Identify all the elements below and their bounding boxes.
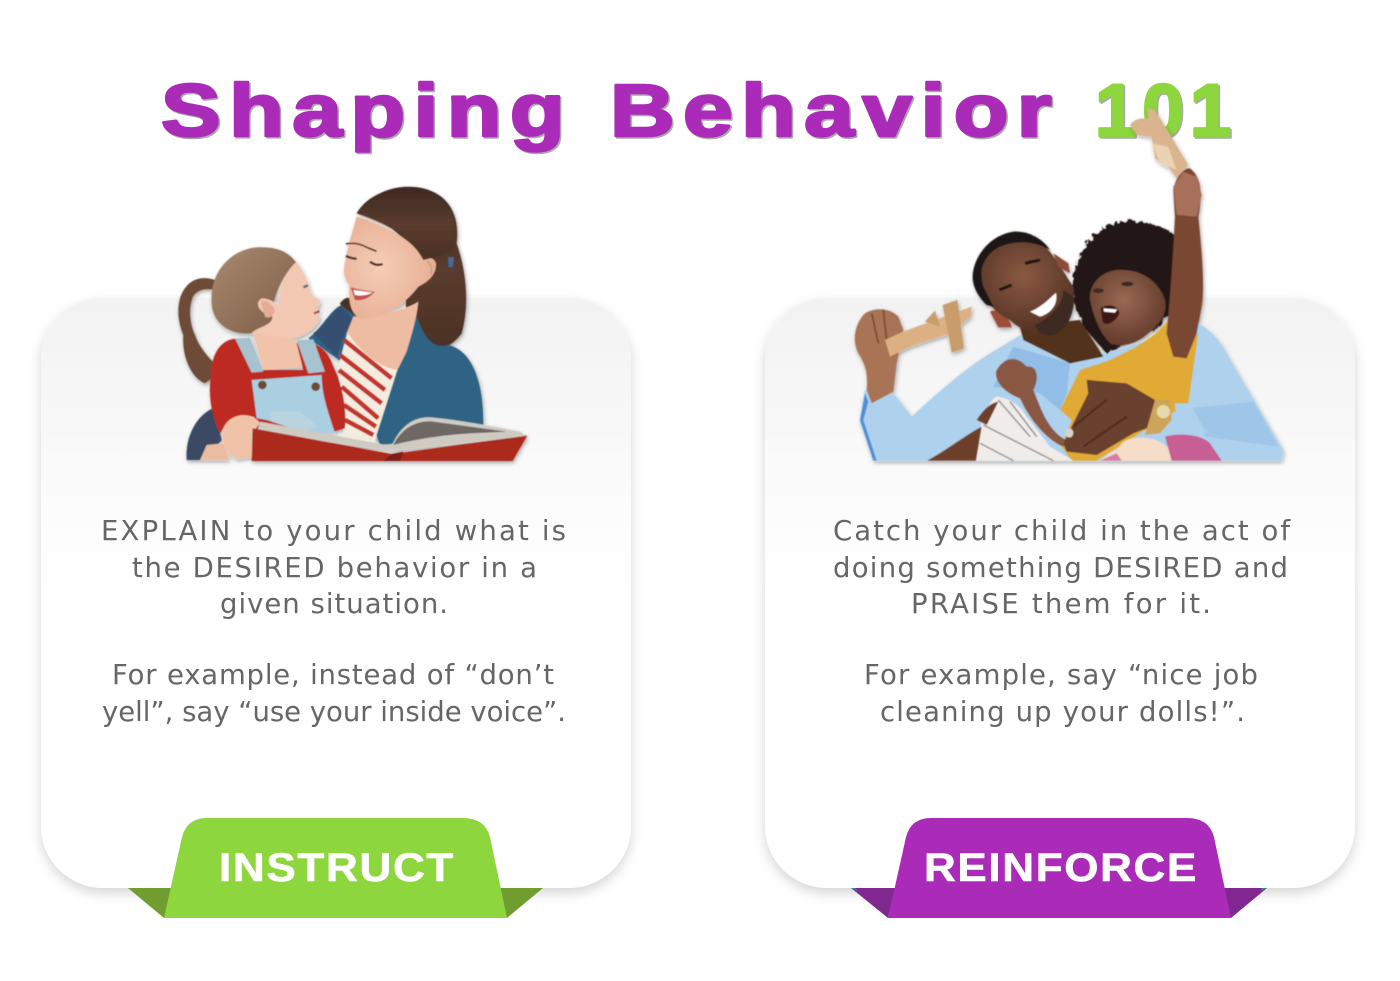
father's neck bbox=[1020, 320, 1103, 363]
child's shorts bbox=[975, 397, 1073, 461]
girl's braid bbox=[178, 278, 222, 383]
child's yellow shirt bbox=[1060, 320, 1198, 461]
photo: father and child playing with wooden planes bbox=[855, 108, 1283, 461]
body text: reinforce: Catch your child in the act of bbox=[833, 515, 1291, 547]
father's forearm and hand bbox=[855, 309, 903, 403]
title: 101 bbox=[1096, 70, 1240, 154]
title bbox=[161, 69, 1240, 154]
mother's cardigan bbox=[308, 305, 483, 445]
child's raised arm and hand bbox=[1167, 168, 1203, 358]
girl's neck bbox=[253, 333, 303, 370]
book pages bbox=[257, 417, 527, 450]
flowers bbox=[1100, 437, 1175, 461]
mother's hair back bbox=[357, 187, 466, 353]
mother's sleeve bbox=[187, 408, 222, 460]
father's ear bbox=[990, 310, 1012, 327]
photo: mother and daughter reading a book bbox=[178, 187, 527, 461]
girl's hair bbox=[212, 247, 297, 333]
child's face bbox=[1090, 270, 1166, 345]
ribbon: INSTRUCT bbox=[128, 818, 543, 918]
mother's hair front bbox=[357, 188, 456, 260]
wooden plane in father's hand bbox=[885, 307, 972, 357]
father's hair bbox=[973, 232, 1050, 307]
mother's cardigan cuff area bbox=[340, 433, 375, 447]
father's head bbox=[973, 238, 1074, 335]
father's hand on child bbox=[1063, 380, 1155, 455]
body text: instruct: For example, instead of “don’t bbox=[112, 659, 554, 691]
title: Shaping bbox=[162, 70, 574, 154]
body text: reinforce: PRAISE them for it. bbox=[911, 588, 1211, 620]
girl's face bbox=[252, 262, 320, 340]
body text: reinforce: cleaning up your dolls!”. bbox=[880, 696, 1245, 728]
child's leg bbox=[927, 402, 998, 461]
panel: instruct bbox=[41, 187, 631, 918]
ribbon: REINFORCE: REINFORCE bbox=[924, 846, 1198, 890]
body text: instruct: yell”, say “use your inside voice”. bbox=[102, 696, 566, 728]
wooden plane held high bbox=[1130, 108, 1188, 178]
body text: instruct: the DESIRED behavior in a bbox=[132, 552, 537, 584]
mother's face bbox=[344, 217, 436, 318]
child's hair back bbox=[1073, 221, 1177, 353]
card background: reinforce bbox=[765, 298, 1355, 888]
body text: reinforce: doing something DESIRED and bbox=[833, 552, 1288, 584]
body text: instruct bbox=[101, 515, 566, 728]
father's cuff bbox=[1175, 403, 1207, 433]
mother's striped shirt bbox=[338, 333, 397, 440]
title: Behavior bbox=[610, 69, 1060, 152]
panel: reinforce bbox=[765, 298, 1355, 918]
ribbon: INSTRUCT: INSTRUCT bbox=[219, 846, 455, 890]
book cover bbox=[252, 428, 527, 461]
body text: instruct: given situation. bbox=[220, 588, 448, 620]
body text: reinforce: For example, say “nice job bbox=[864, 659, 1258, 691]
father's shirt bbox=[860, 323, 1283, 461]
girl's red shirt bbox=[210, 338, 345, 433]
body text: instruct: EXPLAIN to your child what is bbox=[101, 515, 566, 547]
girl's overalls bbox=[235, 338, 325, 373]
gold watch bbox=[1145, 400, 1172, 435]
title: 101 bbox=[1095, 69, 1238, 152]
father's beard and smile bbox=[1035, 290, 1074, 335]
child's small hand and arm bbox=[996, 359, 1067, 447]
title: Behavior bbox=[612, 70, 1062, 154]
ribbon: REINFORCE bbox=[851, 818, 1267, 918]
body text: reinforce bbox=[833, 515, 1291, 728]
card background: instruct bbox=[41, 298, 631, 888]
mother's neck bbox=[347, 302, 418, 372]
girl's hand bbox=[222, 415, 260, 459]
title: Shaping bbox=[161, 69, 573, 152]
